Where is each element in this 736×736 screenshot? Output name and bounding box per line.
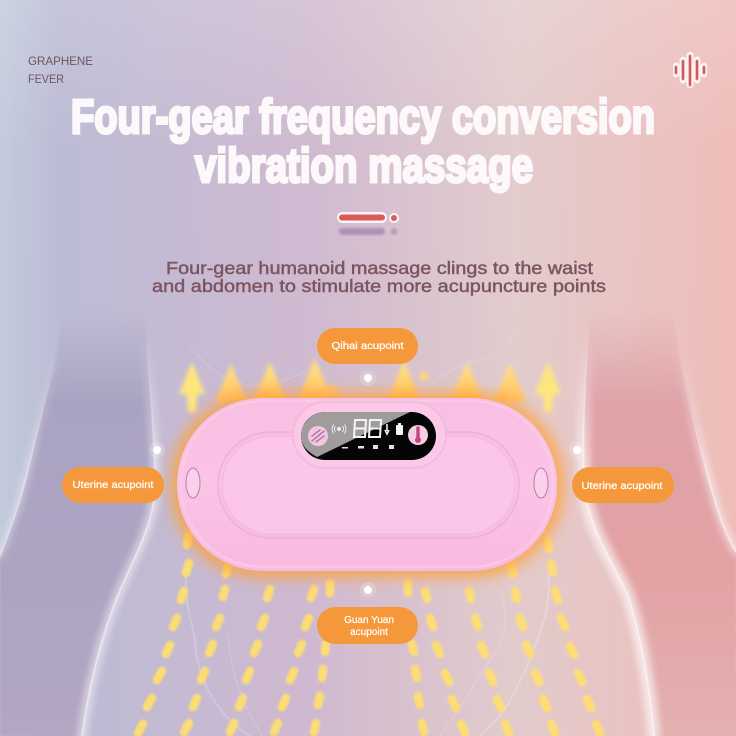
divider accent xyxy=(337,212,399,235)
right gap between waist and arm xyxy=(584,310,736,736)
subtitle xyxy=(152,258,606,296)
icon: temperature button xyxy=(408,425,428,445)
callout: Guan Yuan acupoint xyxy=(317,607,418,644)
pelvis outline xyxy=(186,330,549,736)
callout: Uterine acupoint left: Uterine acupoint xyxy=(72,480,154,491)
icon: sound wave xyxy=(676,55,704,85)
subtitle: and abdomen to stimulate more acupuncture points xyxy=(152,276,606,296)
icon: battery xyxy=(396,423,403,435)
subtitle: Four-gear humanoid massage clings to the waist xyxy=(166,258,593,278)
callout: Qihai acupoint xyxy=(317,328,418,364)
inner groove xyxy=(218,432,519,538)
orange glow xyxy=(170,392,564,578)
side buttons xyxy=(186,468,200,498)
callout: Uterine acupoint left xyxy=(62,467,164,503)
callout: Uterine acupoint right xyxy=(572,467,674,503)
left gap between arm and waist xyxy=(0,310,155,736)
brand label: FEVER xyxy=(28,72,64,86)
display screen xyxy=(301,412,436,460)
callout: Guan Yuan acupoint: acupoint xyxy=(350,627,388,638)
upward heat arrows xyxy=(179,358,561,412)
callout: Qihai acupoint: Qihai acupoint xyxy=(332,341,404,352)
icon: mode button xyxy=(308,426,328,446)
icon: signal xyxy=(332,424,346,434)
brand label: GRAPHENE xyxy=(28,54,93,68)
acupoint dots xyxy=(149,370,585,598)
gear indicators xyxy=(342,445,394,449)
digit readout xyxy=(354,420,381,437)
callout: Uterine acupoint right: Uterine acupoint xyxy=(582,481,663,492)
belt body xyxy=(177,398,557,571)
display surround xyxy=(293,402,446,468)
title: vibration massage xyxy=(195,140,533,193)
icon: level arrow xyxy=(385,424,389,434)
device: massage belt xyxy=(170,392,564,578)
downward heat dashes xyxy=(138,535,600,733)
callout: Guan Yuan acupoint: Guan Yuan xyxy=(344,615,394,626)
title xyxy=(71,91,655,193)
brand label xyxy=(28,54,93,86)
body silhouette xyxy=(0,310,736,736)
glowing contour lines xyxy=(0,340,736,736)
